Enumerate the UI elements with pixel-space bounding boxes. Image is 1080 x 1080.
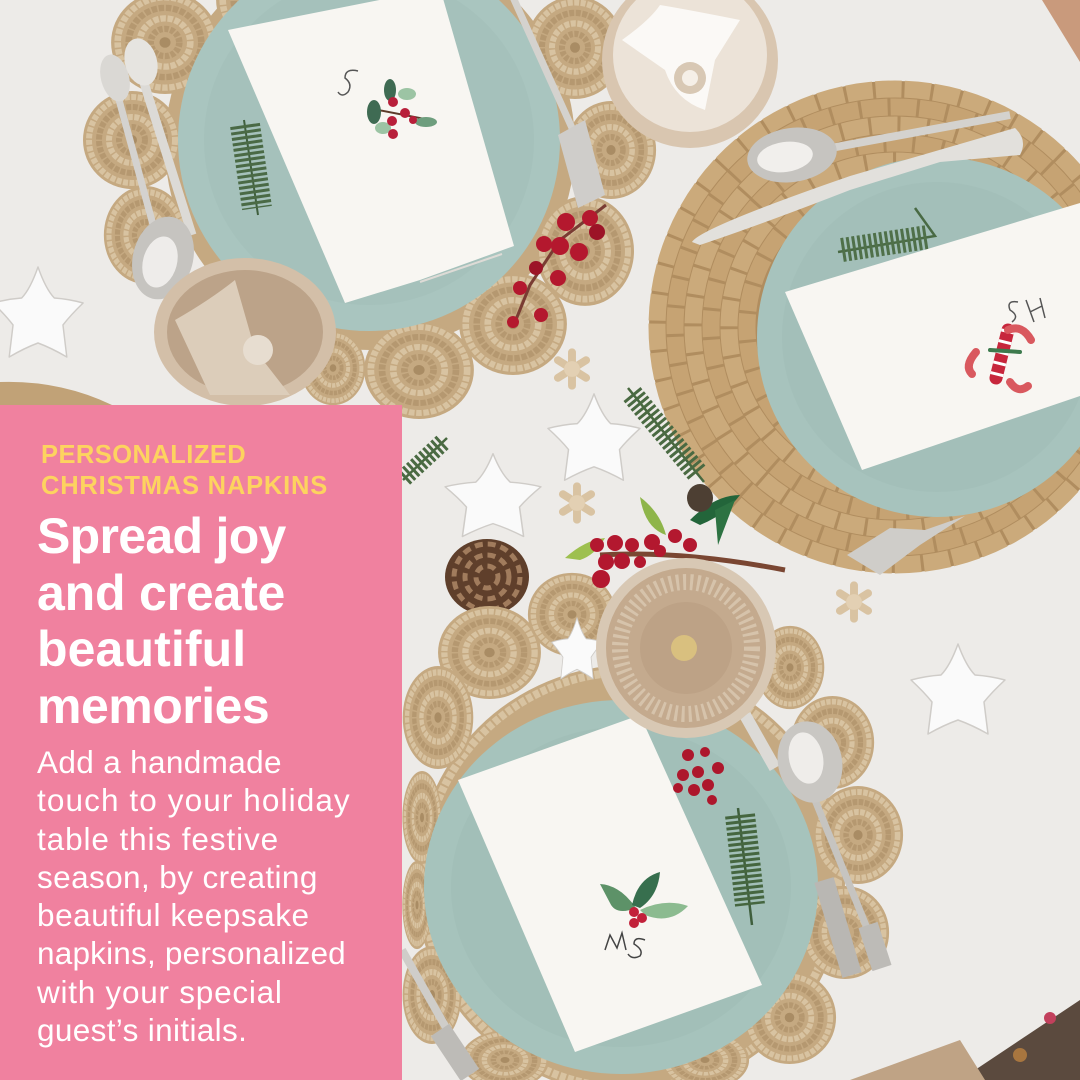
placemat: partial mat at left edge xyxy=(0,382,112,405)
cutlery: bottom spoons and knife xyxy=(402,715,882,1075)
rosemary sprigs: centre xyxy=(403,388,704,482)
plate: top left sage xyxy=(178,0,560,331)
plate: bottom sage xyxy=(424,700,818,1074)
initials SH xyxy=(1009,298,1045,322)
icon: embroidered sprig xyxy=(367,79,437,139)
glass: top centre xyxy=(602,0,778,148)
cutlery: top left spoons and fork xyxy=(95,0,605,306)
napkin: bottom with holly and initials xyxy=(458,715,762,1052)
napkin: top left with holly and initials xyxy=(228,0,514,303)
body text: guest’s initials. xyxy=(37,1012,247,1048)
body text: table this festive xyxy=(37,821,279,857)
rug corners xyxy=(850,0,1080,1080)
stars: centre xyxy=(445,394,1005,734)
headline: beautiful xyxy=(37,621,246,677)
eyebrow heading xyxy=(41,441,328,500)
body text xyxy=(37,744,351,1048)
eyebrow heading: PERSONALIZED xyxy=(41,441,246,469)
icon: embroidered holly xyxy=(600,872,688,928)
rosemary sprig: right plate xyxy=(838,208,935,252)
placemat: right woven xyxy=(649,81,1080,573)
glass: top left xyxy=(154,258,336,406)
body text: touch to your holiday xyxy=(37,782,351,818)
body text: beautiful keepsake xyxy=(37,897,310,933)
star: left xyxy=(0,267,83,357)
panel: pink text block xyxy=(0,405,402,1080)
berries: bottom plate xyxy=(673,747,724,805)
initials S xyxy=(338,70,358,95)
rosemary sprig: top left xyxy=(244,120,258,215)
headline xyxy=(37,508,286,734)
rosemary sprig: bottom plate xyxy=(738,808,752,925)
headline: and create xyxy=(37,564,285,620)
star: on bottom placemat xyxy=(552,618,602,679)
icon: embroidered candy cane xyxy=(969,328,1031,389)
headline: Spread joy xyxy=(37,508,286,564)
body text: season, by creating xyxy=(37,859,318,895)
initials MS xyxy=(605,933,645,958)
berries: top centre sprig xyxy=(507,205,606,328)
cutlery: right spoon, knife, fork xyxy=(692,115,1023,575)
glass: centre xyxy=(596,558,776,738)
pinecone xyxy=(445,539,529,615)
plate: right sage xyxy=(757,157,1080,517)
body text: Add a handmade xyxy=(37,744,282,780)
holly berries and leaves: centre xyxy=(565,484,785,588)
body text: napkins, personalized xyxy=(37,935,346,971)
snowflakes xyxy=(558,352,868,619)
placemat: top left jute coils xyxy=(83,0,656,419)
body text: with your special xyxy=(37,974,283,1010)
headline: memories xyxy=(37,678,269,734)
placemat: bottom jute coils xyxy=(402,573,903,1080)
eyebrow heading: CHRISTMAS NAPKINS xyxy=(41,472,328,500)
napkin: right with candy cane and initials xyxy=(785,203,1080,470)
